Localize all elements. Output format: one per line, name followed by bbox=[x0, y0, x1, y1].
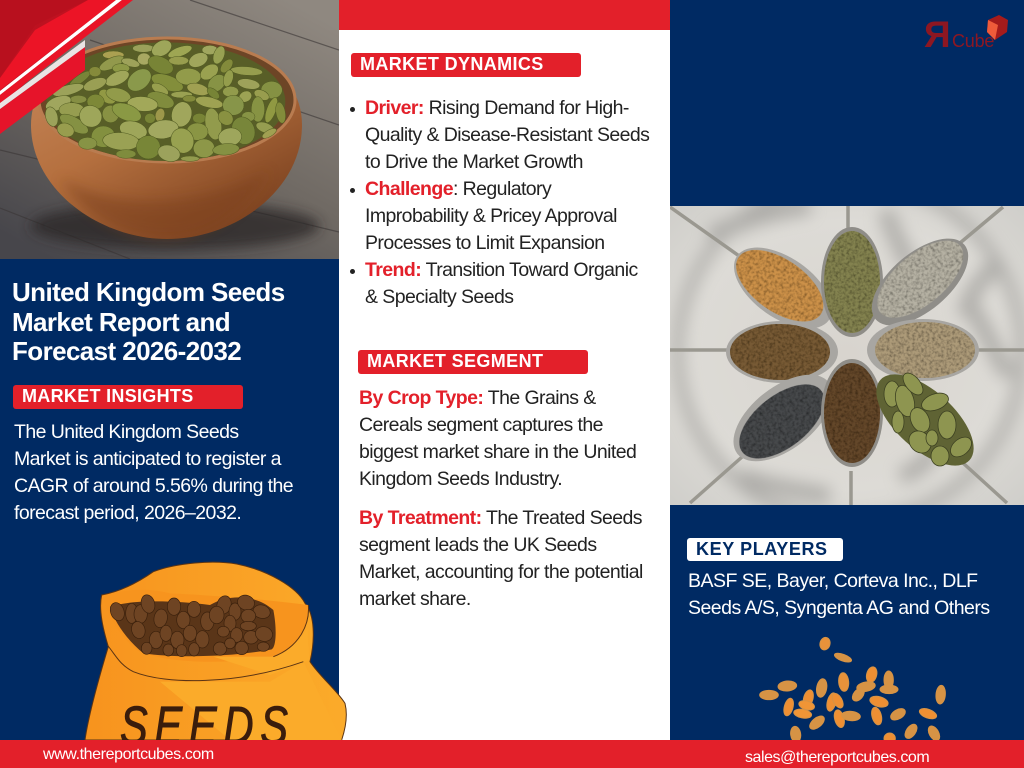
panel: left navy column bbox=[0, 259, 339, 740]
text: dynamics bullet list: Trend: Transition Toward Organic bbox=[365, 259, 638, 281]
text: dynamics bullet list bbox=[350, 97, 650, 308]
text: by crop type bbox=[359, 387, 636, 490]
wooden bowl bbox=[31, 38, 302, 239]
text: market insights body: The United Kingdom Seeds bbox=[14, 421, 239, 443]
text: dynamics bullet list: Processes to Limit Expansion bbox=[365, 232, 605, 254]
spoon: sunflower seeds bbox=[857, 223, 983, 341]
spoon: pumpkin seeds bbox=[861, 358, 989, 482]
heading: market segment: MARKET SEGMENT bbox=[367, 351, 543, 371]
spoon: poppy seeds bbox=[718, 358, 848, 478]
red ribbon corner graphic bbox=[0, 0, 133, 134]
text: dynamics bullet list: Quality & Disease-Resistant Seeds bbox=[365, 124, 649, 146]
title: United Kingdom Seeds bbox=[12, 277, 285, 307]
heading: market dynamics: MARKET DYNAMICS bbox=[360, 54, 544, 74]
text: key players list bbox=[688, 570, 990, 619]
text: key players list: Seeds A/S, Syngenta AG and Others bbox=[688, 597, 990, 619]
spoon: cumin seeds bbox=[726, 321, 838, 383]
photo: bowl of pumpkin seeds bbox=[0, 0, 339, 259]
text: key players list: BASF SE, Bayer, Corteva Inc., DLF bbox=[688, 570, 978, 592]
text: by treatment bbox=[359, 507, 643, 610]
text: by crop type: biggest market share in the United bbox=[359, 441, 636, 463]
icon: orange seed sack bbox=[84, 562, 347, 740]
text: by crop type: Kingdom Seeds Industry. bbox=[359, 468, 562, 490]
heading: market segment bbox=[358, 350, 588, 374]
text: dynamics bullet list: & Specialty Seeds bbox=[365, 286, 513, 308]
text: market insights body: forecast period, 2026–2032. bbox=[14, 502, 241, 524]
spoon: caraway seeds bbox=[821, 359, 883, 467]
heading: market dynamics bbox=[351, 53, 581, 77]
text: by treatment: Market, accounting for the potential bbox=[359, 561, 643, 583]
title bbox=[12, 277, 285, 366]
text: by treatment: segment leads the UK Seeds bbox=[359, 534, 596, 556]
footer: email: sales@thereportcubes.com bbox=[745, 749, 929, 766]
text: by treatment: market share. bbox=[359, 588, 471, 610]
spoon: mustard seeds bbox=[720, 231, 846, 345]
panel: centre red header bar bbox=[339, 0, 670, 30]
text: by treatment: By Treatment: The Treated Seeds bbox=[359, 507, 642, 529]
text: dynamics bullet list: Improbability & Pricey Approval bbox=[365, 205, 617, 227]
photo: spoons of seeds bbox=[670, 206, 1024, 505]
text: dynamics bullet list: Challenge: Regulatory bbox=[365, 178, 551, 200]
heading: key players: KEY PLAYERS bbox=[696, 539, 828, 559]
footer bar bbox=[0, 740, 1024, 768]
text: market insights body: CAGR of around 5.56% during the bbox=[14, 475, 293, 497]
panel: right navy column bbox=[670, 0, 1024, 740]
heading: market insights bbox=[13, 385, 243, 409]
heading: market insights: MARKET INSIGHTS bbox=[22, 386, 194, 406]
title: Forecast 2026-2032 bbox=[12, 336, 241, 366]
text: by crop type: Cereals segment captures the bbox=[359, 414, 603, 436]
text: by crop type: By Crop Type: The Grains & bbox=[359, 387, 596, 409]
text: market insights body: Market is anticipated to register a bbox=[14, 448, 281, 470]
logo: RCube bbox=[924, 14, 1008, 50]
footer: website: www.thereportcubes.com bbox=[43, 746, 214, 763]
beans bbox=[108, 593, 274, 657]
spoon handles bbox=[670, 206, 1024, 505]
spoon: fennel seeds bbox=[821, 227, 883, 337]
pumpkin seeds bbox=[43, 37, 287, 164]
icon: scattered seeds bbox=[759, 636, 946, 740]
text: dynamics bullet list: Driver: Rising Demand for High- bbox=[365, 97, 629, 119]
text: dynamics bullet list: to Drive the Market Growth bbox=[365, 151, 583, 173]
title: Market Report and bbox=[12, 306, 230, 336]
panel: centre white column bbox=[339, 0, 670, 740]
text: market insights body bbox=[14, 421, 293, 524]
spoon: buckwheat bbox=[867, 319, 979, 381]
